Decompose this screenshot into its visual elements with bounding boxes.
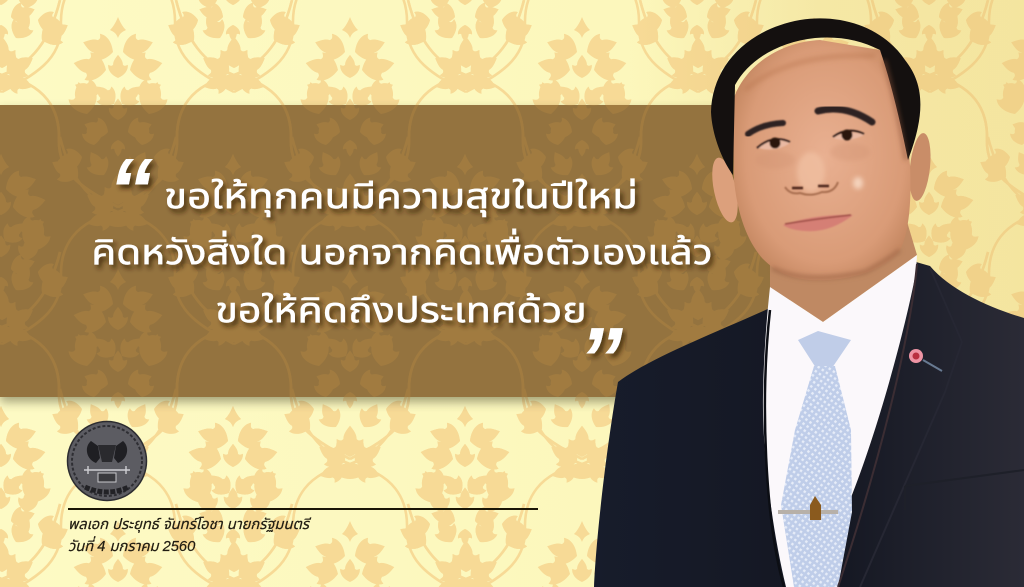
quote band [0,105,790,402]
face shading [745,56,906,278]
face [733,40,911,280]
tie [781,331,852,587]
ears [707,155,743,225]
lapel highlights [838,264,917,587]
attribution text: วันที่ 4 มกราคม 2560 [68,536,196,555]
quote mark: closing: ” [578,310,623,410]
shirt [763,255,917,587]
quote text: ขอให้ทุกคนมีความสุขในปีใหม่ [164,177,638,217]
divider line [68,508,538,510]
eyebrows [748,109,872,134]
eyes [757,130,864,150]
quote text [91,177,713,330]
icon: lapel pin [909,349,942,371]
mouth [783,215,853,231]
nose [785,182,838,195]
icon: government seal [68,422,146,500]
hair [711,18,920,175]
attribution text: พลเอก ประยุทธ์ จันทร์โอชา นายกรัฐมนตรี [68,516,312,533]
portrait of the prime minister [594,18,1024,587]
quote mark: opening: “ [108,141,153,241]
attribution text [68,516,312,555]
jacket [594,262,1024,587]
quote text: คิดหวังสิ่งใด นอกจากคิดเพื่อตัวเองแล้ว [91,228,713,272]
quote text: ขอให้คิดถึงประเทศด้วย [215,291,587,330]
neck [770,215,917,322]
tie clip [778,496,838,520]
